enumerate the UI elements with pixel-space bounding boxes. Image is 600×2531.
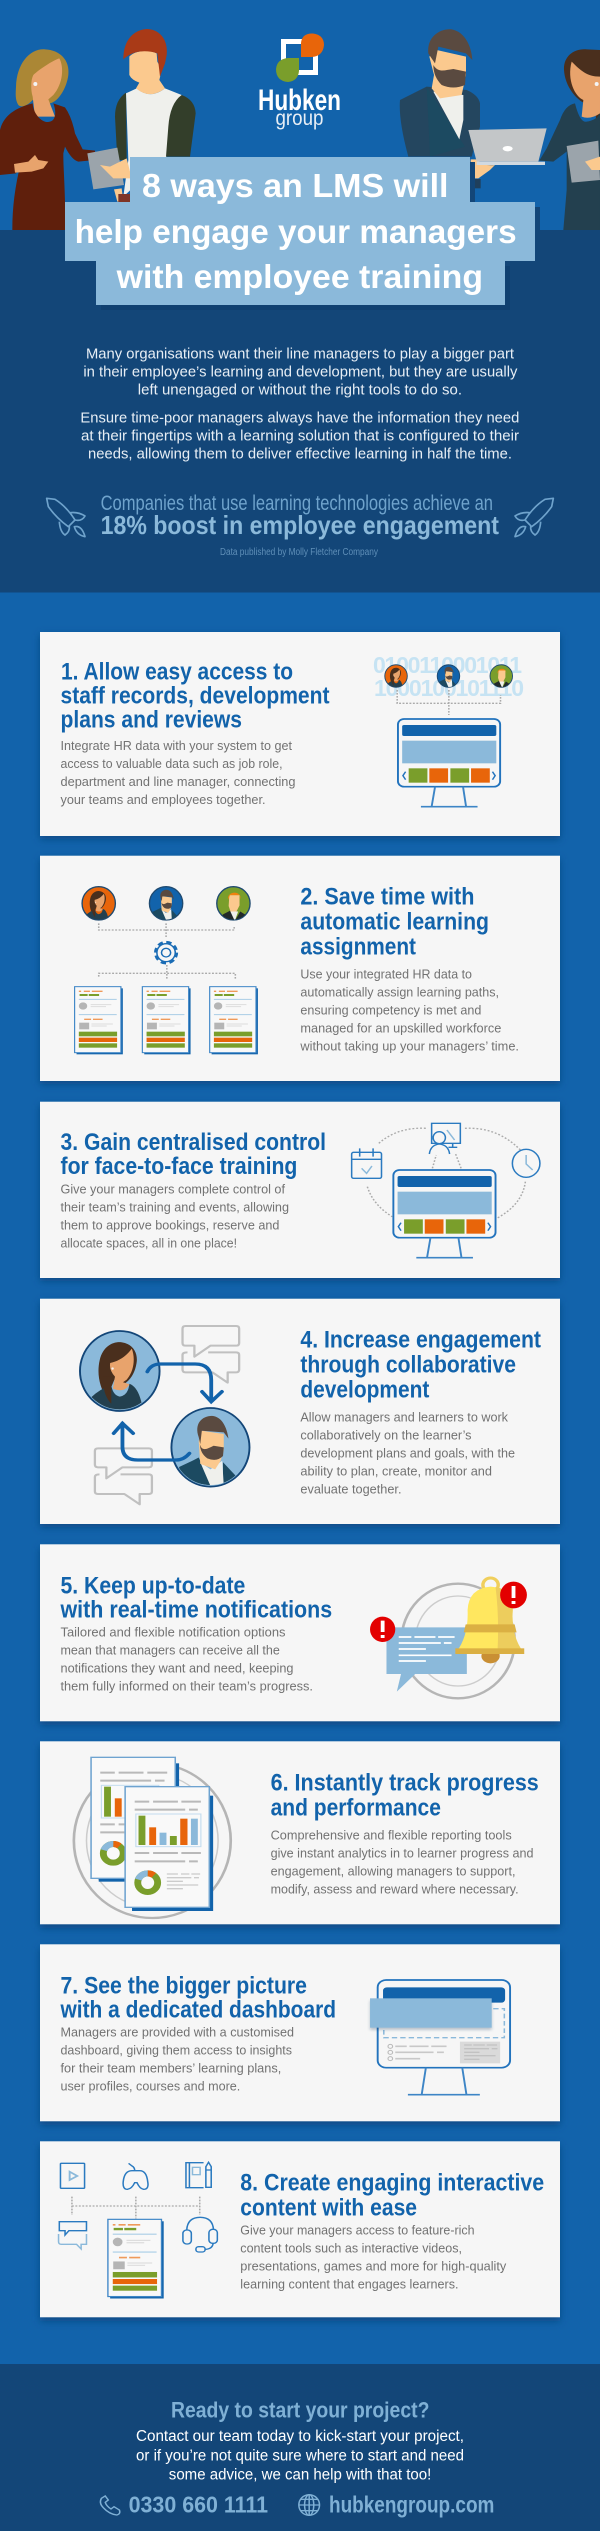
panel 5: notifications: [40, 1544, 560, 1725]
icon: notebook and pencil: [186, 2162, 211, 2188]
body 8: learning content that engages learners.: [240, 2276, 458, 2291]
body 5: notifications they want and need, keeping: [60, 1660, 294, 1675]
body 1: [60, 738, 296, 807]
panel 7: dashboard: [40, 1944, 560, 2125]
logo: Hubken group: group: [276, 107, 324, 130]
panel 1: staff records: [40, 632, 560, 839]
intro text: at their fingertips with a learning solution that is configured to their: [81, 428, 519, 444]
illustration: dashboard monitor: [370, 1980, 510, 2095]
body 3: Give your managers complete control of: [60, 1181, 285, 1196]
body 4: Allow managers and learners to work: [300, 1409, 508, 1424]
title: [65, 157, 540, 310]
icon: video: [60, 2163, 85, 2188]
heading 2: 2. Save time with: [300, 883, 474, 910]
footer band: [0, 2364, 600, 2531]
body 2: Use your integrated HR data to: [300, 966, 472, 981]
body 1: department and line manager, connecting: [60, 774, 296, 789]
illustration: binary data, avatars, monitor: [373, 652, 524, 807]
body 8: presentations, games and more for high-quality: [240, 2258, 507, 2273]
heading 3: [60, 1129, 326, 1180]
avatar: woman: [80, 1331, 160, 1413]
heading 3: 3. Gain centralised control: [60, 1129, 326, 1156]
body 4: collaboratively on the learner’s: [300, 1427, 472, 1442]
body 2: [299, 966, 519, 1053]
heading 5: with real-time notifications: [60, 1596, 332, 1623]
body 6: give instant analytics in to learner progress and: [271, 1845, 534, 1860]
body 8: content tools such as interactive videos,: [240, 2240, 462, 2255]
avatar: man: [171, 1408, 249, 1487]
body 2: without taking up your managers’ time.: [299, 1038, 519, 1053]
footer call to action: Ready to start your project?: [171, 2397, 429, 2422]
body 4: ability to plan, create, monitor and: [300, 1463, 492, 1478]
title: 8 ways an LMS will: [142, 167, 448, 204]
heading 1: plans and reviews: [60, 706, 242, 733]
footer call to action: or if you’re not quite sure where to start and need: [136, 2447, 464, 2464]
heading 2: [300, 883, 489, 960]
speech bubbles: [95, 1326, 239, 1504]
body 6: Comprehensive and flexible reporting tools: [271, 1827, 512, 1842]
illustration: right people: [400, 29, 600, 230]
intro text: Many organisations want their line managers to play a bigger part: [86, 346, 514, 362]
panel 4: collaborative development: [40, 1299, 560, 1527]
illustration: binary data, avatars, monitor: 0100110001011: [373, 652, 522, 678]
body 8: Give your managers access to feature-rich: [240, 2222, 474, 2237]
intro text: Ensure time-poor managers always have the information they need: [80, 410, 519, 426]
heading 1: staff records, development: [60, 683, 330, 710]
heading 1: 1. Allow easy access to: [61, 658, 293, 685]
heading 8: content with ease: [240, 2195, 417, 2222]
body 1: access to valuable data such as job role,: [60, 756, 282, 771]
heading 3: for face-to-face training: [60, 1153, 297, 1180]
logo: Hubken group: Hubken: [258, 84, 341, 117]
heading 7: [60, 1972, 336, 2023]
body 1: Integrate HR data with your system to get: [60, 738, 292, 753]
illustration: calendar, trainer, clock, monitor: [352, 1123, 540, 1258]
body 2: automatically assign learning paths,: [300, 984, 499, 999]
header dark band: [0, 230, 600, 592]
body 7: [60, 2024, 294, 2093]
panel 3: face-to-face training: [40, 1102, 560, 1281]
heading 5: [60, 1572, 332, 1623]
icon: message: [386, 1627, 467, 1692]
body 2: ensuring competency is met and: [300, 1002, 481, 1017]
body 5: [60, 1624, 313, 1693]
icon: calendar: [352, 1148, 382, 1178]
icon: clock: [512, 1149, 540, 1177]
icon: globe: [299, 2495, 320, 2515]
intro text: needs, allowing them to deliver effective learning in half the time.: [88, 446, 512, 462]
arrow: man to woman: [114, 1423, 189, 1460]
heading 8: 8. Create engaging interactive: [240, 2170, 544, 2197]
icon: phone: [100, 2496, 120, 2515]
title: help engage your managers: [75, 213, 517, 250]
heading 6: 6. Instantly track progress: [271, 1770, 539, 1797]
heading 2: assignment: [300, 933, 416, 960]
heading 6: [271, 1770, 539, 1822]
heading 2: automatic learning: [300, 908, 489, 935]
intro text: in their employee’s learning and development, but they are usually: [83, 364, 518, 380]
intro text: left unengaged or without the right tools to do so.: [138, 382, 462, 398]
statistic callout: Companies that use learning technologies achieve an: [101, 492, 493, 515]
illustration: bell and message alert: [370, 1578, 527, 1698]
heading 6: and performance: [271, 1795, 441, 1822]
body 7: user profiles, courses and more.: [60, 2078, 240, 2093]
statistic callout: 18% boost in employee engagement: [101, 510, 499, 540]
arrow: woman to man: [147, 1364, 222, 1402]
icon: bell: [455, 1578, 524, 1663]
panel 2: automatic assignment: [40, 856, 560, 1084]
body 6: [271, 1827, 534, 1896]
heading 4: [300, 1326, 541, 1404]
body 8: [240, 2222, 507, 2291]
icon: gamepad: [123, 2163, 148, 2189]
heading 4: through collaborative: [300, 1352, 516, 1379]
title: with employee training: [116, 258, 483, 295]
contact details: [100, 2492, 494, 2518]
contact details: hubkengroup.com: [329, 2492, 494, 2518]
body 7: for their team members’ learning plans,: [60, 2060, 281, 2075]
footer call to action: some advice, we can help with that too!: [169, 2467, 431, 2484]
illustration: two people exchanging feedback: [80, 1326, 249, 1504]
heading 4: 4. Increase engagement: [300, 1326, 541, 1353]
illustration: left people: [0, 29, 196, 230]
body 3: allocate spaces, all in one place!: [60, 1235, 237, 1250]
body 2: managed for an upskilled workforce: [300, 1020, 501, 1035]
heading 8: [240, 2170, 544, 2222]
body 4: [300, 1409, 515, 1496]
body 3: their team’s training and events, allowing: [60, 1199, 289, 1214]
illustration: content tools: [59, 2162, 217, 2298]
report back: [91, 1757, 179, 1882]
heading 1: [60, 658, 330, 733]
intro text: [80, 346, 519, 462]
heading 5: 5. Keep up-to-date: [60, 1572, 245, 1599]
statistic callout: Data published by Molly Fletcher Company: [220, 547, 378, 558]
icon: headset: [183, 2217, 217, 2252]
body 1: your teams and employees together.: [60, 792, 266, 807]
body 6: engagement, allowing managers to support,: [271, 1863, 516, 1878]
footer call to action: [136, 2397, 464, 2484]
heading 7: 7. See the bigger picture: [60, 1972, 307, 1999]
body 3: [60, 1181, 289, 1250]
illustration: binary data, avatars, monitor: 1000100101110: [374, 675, 524, 701]
icon: right rocket: [515, 498, 553, 537]
heading 4: development: [300, 1377, 429, 1404]
report front: [125, 1787, 213, 1911]
icon: trainer with board: [429, 1123, 460, 1154]
logo: Hubken group: [258, 33, 341, 130]
panel 6: progress tracking: [40, 1741, 560, 1928]
panel 8: interactive content: [40, 2141, 560, 2321]
body 5: mean that managers can receive all the: [60, 1642, 280, 1657]
body 7: Managers are provided with a customised: [60, 2024, 294, 2039]
body 3: them to approve bookings, reserve and: [60, 1217, 279, 1232]
statistic callout: [47, 492, 553, 558]
illustration: reports: [74, 1757, 231, 1918]
body 5: Tailored and flexible notification options: [60, 1624, 286, 1639]
icon: chat: [59, 2222, 86, 2249]
illustration: avatars, gear, documents: [75, 887, 258, 1054]
body 6: modify, assess and reward where necessary.: [271, 1881, 519, 1896]
contact details: 0330 660 1111: [129, 2492, 268, 2518]
heading 7: with a dedicated dashboard: [60, 1996, 336, 2023]
body 4: development plans and goals, with the: [300, 1445, 515, 1460]
icon: left rocket: [47, 498, 85, 537]
icon: gear: [156, 942, 176, 963]
footer call to action: Contact our team today to kick-start your project,: [136, 2428, 464, 2445]
body 5: them fully informed on their team’s progress.: [60, 1678, 313, 1693]
body 7: dashboard, giving them access to insights: [60, 2042, 292, 2057]
body 4: evaluate together.: [300, 1481, 402, 1496]
